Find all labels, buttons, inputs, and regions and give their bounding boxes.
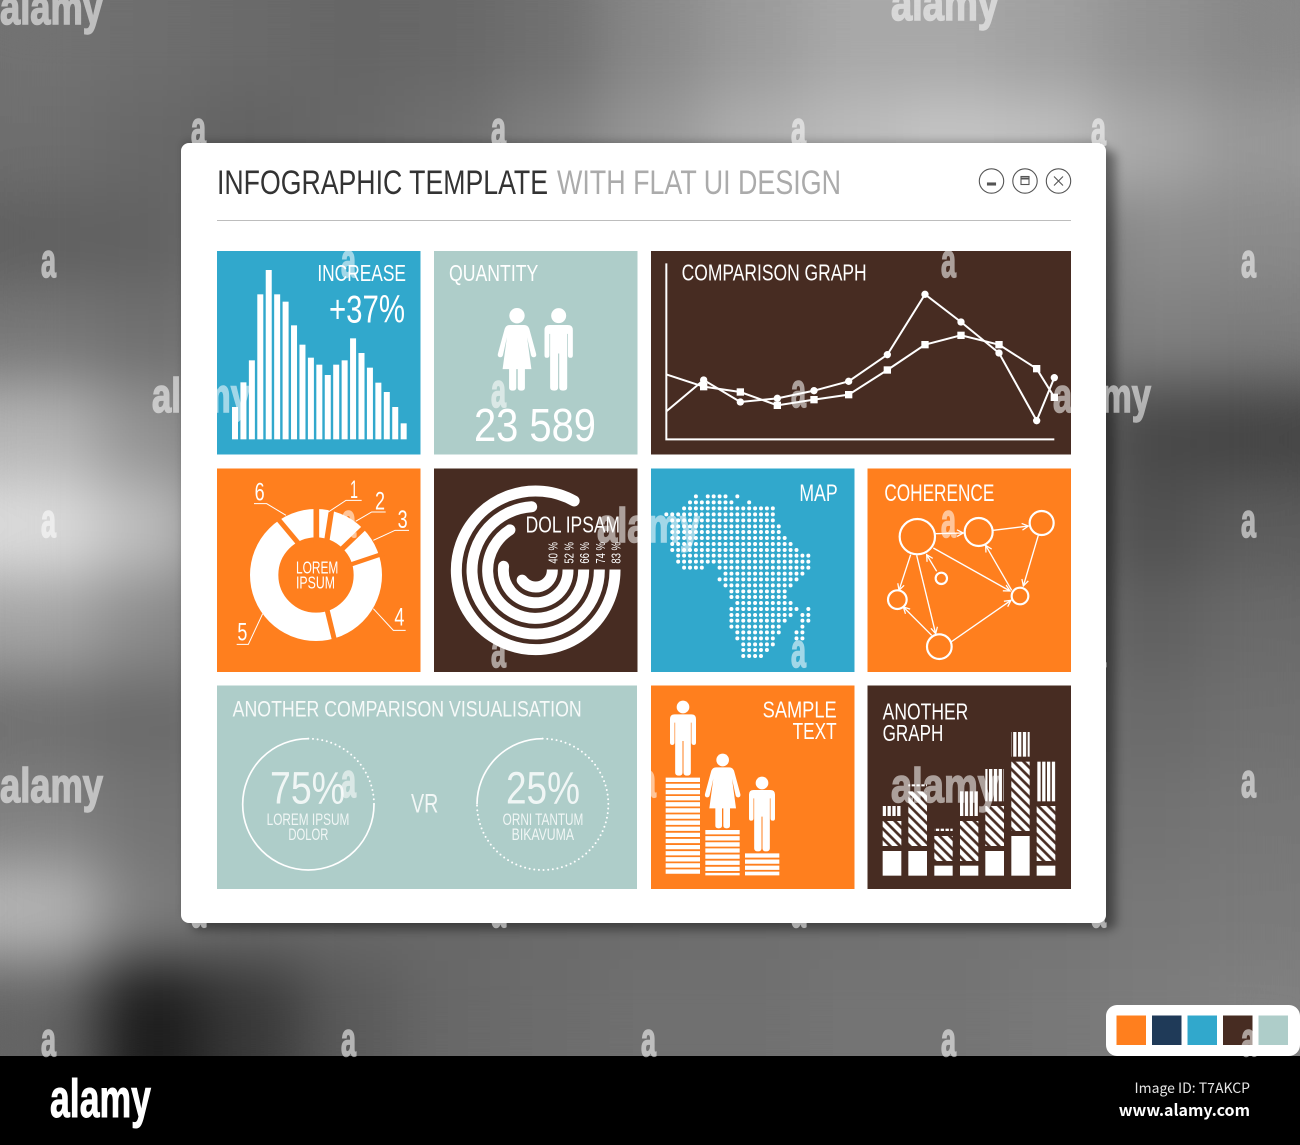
window [181,143,1106,923]
donut numbers [237,476,408,646]
panel: quantity [434,251,638,454]
icon: people on podium [670,701,775,851]
donut numbers: 1 [350,476,358,504]
watermarks: alamy [891,760,999,813]
sample text label: TEXT [793,718,837,744]
watermarks: a [341,495,356,548]
watermarks: a [491,625,506,678]
watermarks: a [1241,235,1256,288]
25% text: ORNI TANTUM [503,810,583,829]
watermarks: alamy [1053,370,1151,423]
watermarks: alamy [0,760,103,813]
donut numbers: 2 [375,487,385,515]
donut numbers: 5 [237,618,247,646]
watermarks: a [791,885,806,938]
watermarks: a [1241,1014,1256,1067]
panel: coherence [868,468,1071,672]
radial chart percentages: 74 % [594,542,608,564]
sample text label: SAMPLE [763,696,837,722]
dotted map of Africa [666,496,809,656]
image id: Image ID: T7AKCP [1134,1078,1250,1098]
panel: radial bars [434,468,638,672]
watermarks: a [41,235,56,288]
panel: donut chart [217,468,420,672]
map label: MAP [799,480,838,507]
quantity label: QUANTITY [449,260,539,286]
donut numbers: 4 [394,603,404,631]
watermarks: a [641,1014,656,1067]
radial chart label: DOL IPSAM [526,512,620,538]
watermarks: a [941,1014,956,1067]
line chart [666,263,1058,439]
stacked bar chart [883,732,1055,876]
watermarks: a [941,235,956,288]
panel: comparison graph [651,251,1071,454]
footer logo: alamy [50,1069,151,1129]
donut center label: LOREM [296,558,338,578]
donut leader lines [237,500,409,644]
25% text: 25% [506,762,580,813]
icon: woman and man [498,308,573,391]
donut center label [296,558,338,593]
panel: another graph [868,686,1071,889]
radial bar chart [456,491,615,650]
watermarks: a [191,103,206,156]
website: www.alamy.com [1119,1097,1250,1121]
watermarks: a [341,755,356,808]
panel: sample text [651,686,854,889]
watermarks: a [491,885,506,938]
watermarks: a [1091,885,1106,938]
panel: another comparison visualisation [217,686,637,889]
title [217,164,841,202]
colour palette [1106,1005,1300,1056]
title: WITH FLAT UI DESIGN [557,164,841,202]
quantity value: 23 589 [474,399,596,451]
donut numbers: 3 [398,506,408,534]
stacked podium steps [683,778,762,875]
comparison heading: ANOTHER COMPARISON VISUALISATION [233,697,582,722]
25% ring [477,739,608,870]
panel: map [651,468,854,672]
25% text: BIKAVUMA [512,825,575,844]
watermarks: a [41,495,56,548]
watermarks: a [1241,495,1256,548]
increase value: +37% [329,287,405,331]
watermarks: a [491,365,506,418]
watermarks: a [941,495,956,548]
another graph label: GRAPH [883,720,943,746]
25% text [503,762,583,844]
versus label: VR [411,788,438,818]
watermarks: a [1091,625,1106,678]
sample text label [763,696,837,744]
watermarks: a [641,755,656,808]
radial chart percentages: 66 % [578,542,592,564]
radial chart percentages: 83 % [610,542,624,564]
watermarks: a [791,625,806,678]
radial chart percentages: 52 % [562,542,576,564]
75% text [267,762,349,844]
watermarks: alamy [152,370,250,423]
radial chart percentages [546,542,624,564]
watermarks: a [791,103,806,156]
panel: increase [217,251,420,454]
watermarks: a [1091,103,1106,156]
watermarks: a [491,103,506,156]
cover for round caps at bar starts [546,558,629,570]
radial chart percentages: 40 % [546,542,560,564]
window control buttons [979,169,1071,193]
title: INFOGRAPHIC TEMPLATE [217,164,548,202]
coherence label: COHERENCE [884,480,994,507]
watermarks: a [41,1014,56,1067]
donut segments [264,504,385,644]
watermarks: a [791,365,806,418]
watermarks: a [341,235,356,288]
watermarks: a [191,625,206,678]
donut center label: IPSUM [296,573,335,593]
comparison graph label: COMPARISON GRAPH [682,259,867,285]
network diagram [888,511,1054,659]
window drop shadow [181,143,1106,923]
another graph label [883,698,968,746]
bar chart [232,270,407,439]
watermarks: alamy [597,500,700,553]
75% text: DOLOR [288,825,328,844]
75% text: 75% [270,762,345,813]
donut numbers: 6 [255,478,265,506]
footer bar [0,1056,1300,1145]
watermarks: a [1241,755,1256,808]
another graph label: ANOTHER [883,698,968,724]
watermarks: a [341,1014,356,1067]
75% ring [243,739,374,870]
increase label: INCREASE [317,260,406,286]
75% text: LOREM IPSUM [267,810,349,829]
watermarks: a [191,885,206,938]
